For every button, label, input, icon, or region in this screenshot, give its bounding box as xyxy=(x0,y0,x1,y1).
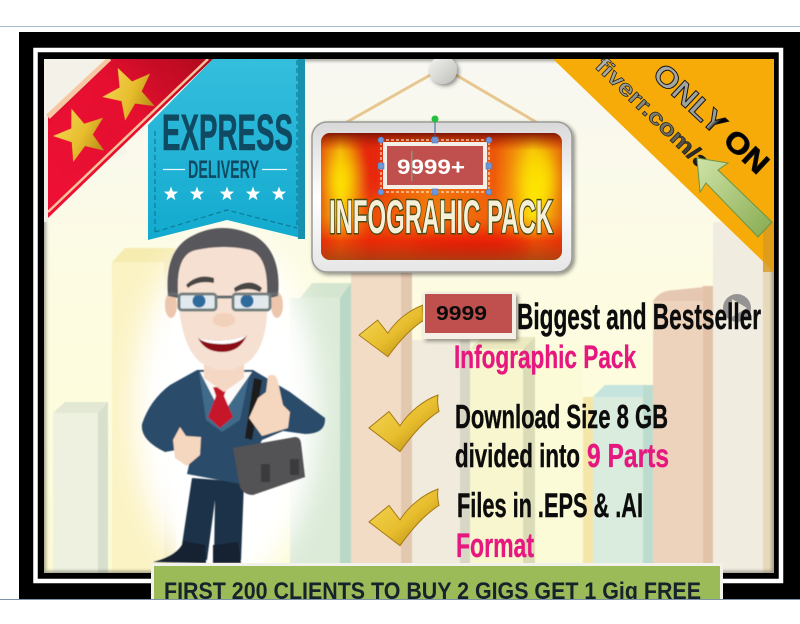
number 9999+: 9999+ xyxy=(397,156,465,179)
selected text box xyxy=(378,116,492,195)
feature: biggest and bestseller xyxy=(359,293,761,375)
text line: divided into xyxy=(455,437,580,474)
orange corner badge xyxy=(553,53,775,272)
play button xyxy=(723,294,751,322)
arrow xyxy=(697,158,772,237)
eyebrows xyxy=(186,277,262,292)
feature: download size xyxy=(369,395,669,474)
legs xyxy=(180,478,244,560)
icon: star lower xyxy=(53,108,104,162)
green offer bar xyxy=(151,563,723,599)
shoes xyxy=(153,541,241,563)
eyes xyxy=(192,294,206,308)
face xyxy=(178,247,267,370)
hair xyxy=(168,228,279,298)
badge text: fiverr url: fiverr.com/a xyxy=(591,53,716,175)
heading: express: EXPRESS xyxy=(162,104,293,161)
tie xyxy=(208,387,233,428)
right lens xyxy=(233,294,270,310)
text pink: 9 Parts xyxy=(587,437,669,474)
number box 9999 xyxy=(423,293,516,339)
bottom rule xyxy=(0,599,800,600)
feature: file formats xyxy=(369,487,643,565)
businessman character xyxy=(142,228,325,563)
left hand xyxy=(173,427,201,466)
icon: nail xyxy=(429,56,457,84)
hanging ropes xyxy=(347,74,536,122)
text line: Download Size 8 GB xyxy=(455,398,668,435)
jacket xyxy=(142,370,325,484)
number box 9999: 9999 xyxy=(436,303,487,325)
background bar chart xyxy=(53,222,774,573)
sign face xyxy=(321,133,562,262)
heading: delivery: DELIVERY xyxy=(188,156,259,184)
glasses xyxy=(168,294,278,297)
mouth xyxy=(198,335,247,352)
ears xyxy=(165,292,177,318)
hanging sign xyxy=(312,56,572,272)
briefcase xyxy=(233,437,305,495)
bag strap xyxy=(245,378,262,440)
express delivery banner xyxy=(148,59,305,240)
glasses lenses xyxy=(179,294,216,310)
icon: check mark xyxy=(369,395,439,452)
icon: check mark xyxy=(369,489,439,546)
icon: five stars xyxy=(164,186,286,200)
green offer bar: FIRST 200 CLIENTS TO BUY 2 GIGS GET 1 Gig FREE xyxy=(164,578,701,605)
right thumb hand xyxy=(249,375,290,436)
sign frame xyxy=(312,122,572,272)
icon: star upper xyxy=(102,68,155,120)
neck xyxy=(204,358,244,392)
text pink: Format xyxy=(456,527,534,565)
sign title: INFOGRAHIC PACK xyxy=(329,190,553,243)
top rule xyxy=(0,26,800,27)
corner ribbon with stars xyxy=(44,56,213,222)
badge text: only on: ONLY ON xyxy=(646,58,775,181)
text line: Files in .EPS & .AI xyxy=(457,487,643,525)
icon: check mark xyxy=(359,305,424,357)
shirt and lapels xyxy=(199,372,250,432)
text line pink: Infographic Pack xyxy=(454,339,636,375)
white glow behind character xyxy=(44,59,774,585)
nose xyxy=(213,313,235,327)
